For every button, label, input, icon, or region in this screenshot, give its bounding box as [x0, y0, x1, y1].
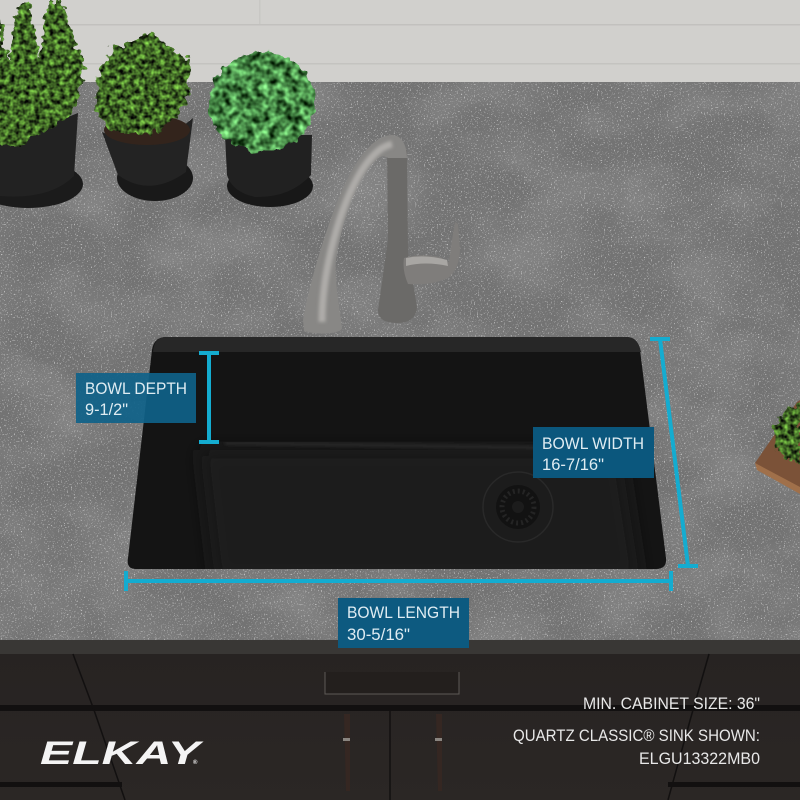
cabinet size note: MIN. CABINET SIZE: 36": [583, 694, 760, 713]
drain: [483, 472, 553, 542]
logo: Elkay: [40, 735, 204, 771]
faucet handle highlight: [406, 256, 448, 266]
width value: 16-7/16": [542, 456, 604, 474]
sink bowl floor: [210, 458, 628, 569]
wood board edge: [755, 463, 800, 494]
depth label: BOWL DEPTH: [85, 380, 187, 398]
faucet spout: [303, 135, 407, 334]
sink: [128, 337, 666, 580]
wood board: [755, 400, 800, 493]
depth label box: [76, 373, 196, 423]
sink ledge highlight: [225, 443, 625, 449]
logo wordmark: ELKAY: [40, 735, 204, 771]
plant: rosemary pot: [0, 0, 84, 208]
herbs: [772, 404, 800, 465]
pot: [102, 118, 193, 186]
saucer: [117, 155, 193, 201]
rosemary foliage: [0, 0, 84, 145]
cabinet drawer handle: [325, 672, 459, 694]
soil: [104, 115, 190, 145]
saucer: [227, 165, 313, 207]
width measure bar: [650, 339, 698, 566]
length label box: [338, 598, 469, 648]
faucet body: [378, 150, 417, 323]
faucet: [303, 135, 460, 334]
plant: parsley pot: [95, 32, 193, 201]
pot: [225, 135, 312, 197]
width label box: [533, 427, 654, 478]
depth value: 9-1/2": [85, 401, 128, 419]
depth measure bar: [199, 353, 219, 442]
spec notes: [513, 694, 760, 768]
width label: BOWL WIDTH: [542, 435, 644, 453]
saucer: [0, 160, 83, 208]
round herb foliage: [209, 52, 315, 152]
cutting board with herbs: [755, 400, 800, 494]
sink shown note: QUARTZ CLASSIC® SINK SHOWN:: [513, 726, 760, 745]
length label: BOWL LENGTH: [347, 604, 460, 622]
sink shape: [128, 337, 666, 569]
sink rim: [153, 337, 641, 352]
model number: ELGU13322MB0: [639, 749, 760, 768]
faucet spout highlight: [322, 144, 392, 322]
countertop: [0, 82, 800, 640]
parsley foliage: [95, 32, 190, 135]
cabinets: [0, 654, 800, 800]
counter front edge: [0, 640, 800, 654]
dimension: bowl width: [533, 339, 698, 566]
pot: [0, 113, 78, 197]
length value: 30-5/16": [347, 626, 410, 644]
faucet handle: [404, 222, 460, 284]
cabinet door handles: [343, 714, 442, 791]
dimension: bowl depth: [76, 353, 219, 442]
floor: [0, 0, 800, 90]
length measure bar: [126, 571, 671, 591]
logo registered mark: ®: [193, 759, 198, 766]
plant: round herb pot: [209, 52, 315, 207]
dimension: bowl length: [126, 571, 671, 648]
